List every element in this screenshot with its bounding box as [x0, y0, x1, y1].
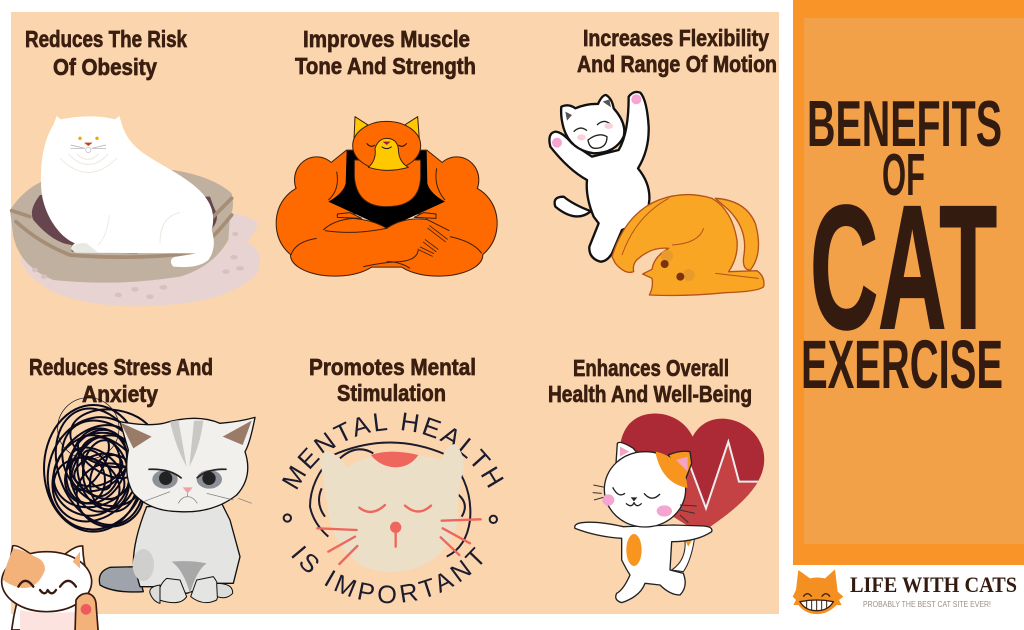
title: OF	[882, 142, 925, 208]
heart	[620, 414, 764, 527]
badge text top: MENTAL HEALTH	[282, 412, 504, 490]
title	[801, 87, 1003, 403]
cat face	[320, 444, 464, 572]
heading: increases flexibility: And Range Of Motion	[577, 51, 777, 77]
illustration: muscular orange cat	[277, 117, 497, 276]
illustration: calico cat with heart monitor	[575, 413, 773, 603]
brain outline	[310, 442, 470, 557]
panel: benefits background	[11, 12, 779, 614]
illustration: stretching white and orange cats	[549, 92, 764, 295]
cat	[575, 442, 712, 603]
logo tagline: PROBABLY THE BEST CAT SITE EVER!	[863, 600, 991, 609]
badge text bottom: IS IMPORTANT	[291, 546, 483, 604]
badge dots	[284, 514, 497, 523]
heading: mental stimulation: Promotes Mental	[309, 354, 476, 380]
logo icon	[793, 569, 843, 614]
heading: reduces the risk of obesity: Reduces The Risk	[25, 26, 187, 52]
heading: reduces stress	[29, 354, 213, 407]
illustration: fat white cat on bed	[10, 116, 260, 306]
heading: reduces the risk of obesity: Of Obesity	[53, 54, 157, 80]
heading: reduces the risk of obesity	[25, 26, 187, 80]
heading: reduces stress: Reduces Stress And	[29, 354, 213, 380]
white cat	[549, 92, 649, 262]
heading: increases flexibility	[577, 25, 777, 77]
illustration: mental health badge	[282, 412, 504, 604]
heading: improves muscle tone: Improves Muscle	[303, 26, 470, 52]
heading: mental stimulation	[309, 354, 476, 406]
illustration: corner waving calico cat	[2, 546, 98, 630]
orange cat	[612, 195, 764, 295]
heading: increases flexibility: Increases Flexibility	[583, 25, 769, 51]
heading: reduces stress: Anxiety	[82, 381, 158, 407]
scribble	[34, 396, 161, 541]
heading: overall health	[548, 355, 752, 407]
panel: title banner	[793, 0, 1024, 565]
heading: improves muscle tone: Tone And Strength	[295, 53, 476, 79]
heading: mental stimulation: Stimulation	[337, 380, 446, 406]
grumpy cat	[99, 417, 255, 603]
heading: overall health: Health And Well-Being	[548, 381, 752, 407]
heading: overall health: Enhances Overall	[573, 355, 729, 381]
heading: improves muscle tone	[295, 26, 476, 79]
illustration: stress scribble and grumpy cat	[34, 396, 255, 603]
logo: life with cats	[793, 569, 1017, 614]
